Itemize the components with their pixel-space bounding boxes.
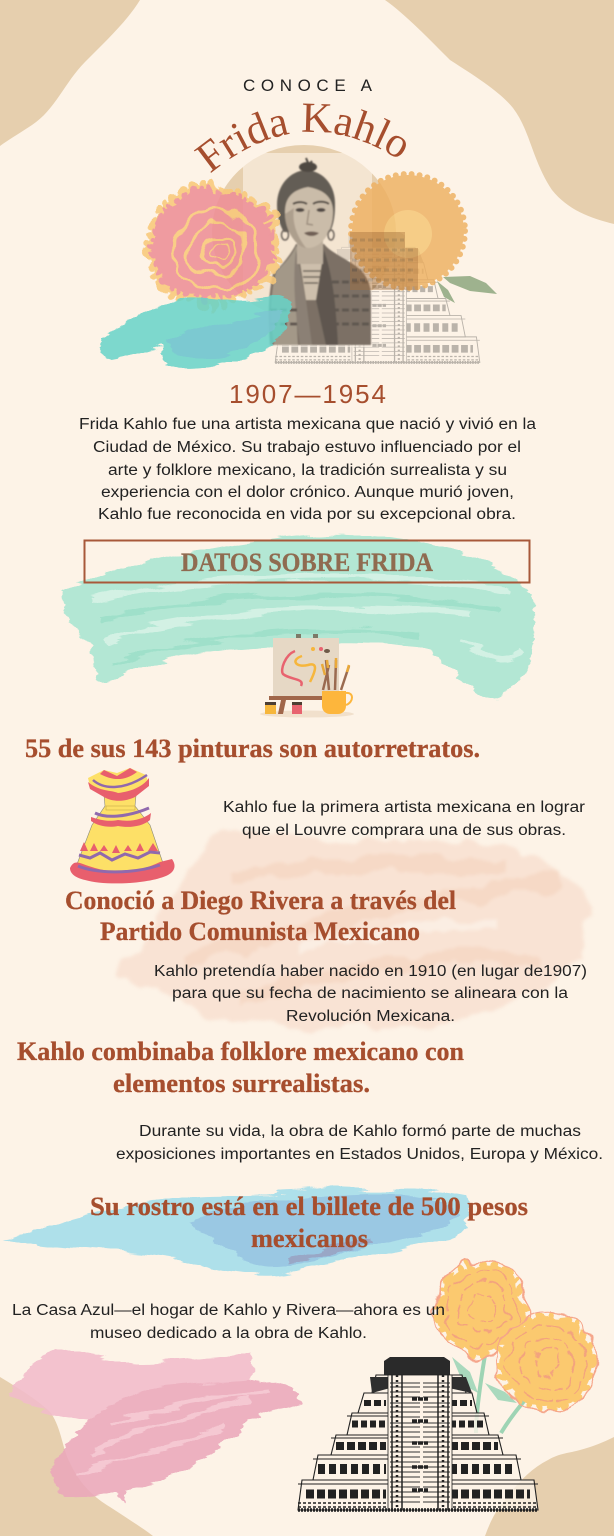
pink brush stroke [10, 1348, 301, 1505]
heading: billete [90, 1192, 528, 1253]
heading: Diego Rivera [65, 886, 456, 946]
text: Louvre: que el Louvre comprara una de sus obras. [242, 822, 566, 839]
heading: folklore: Kahlo combinaba folklore mexicano con [17, 1037, 465, 1066]
title: conoce a: CONOCE A [243, 76, 373, 95]
icon: easel with paints [260, 634, 354, 718]
intro text: arte y folklore mexicano, la tradición surrealista y su [108, 462, 507, 479]
text: Louvre: Kahlo fue la primera artista mexicana en lograr [223, 799, 585, 816]
pink marigold [147, 186, 277, 306]
intro text: Frida Kahlo fue una artista mexicana que nació y vivió en la [79, 416, 536, 433]
stems [476, 1355, 525, 1433]
intro text: Kahlo fue reconocida en vida por su excepcional obra. [98, 506, 516, 523]
hero illustration [100, 145, 497, 368]
text: fecha de nacimiento: Kahlo pretendía haber nacido en 1910 (en lugar de1907) [154, 963, 587, 980]
corner blob: top right [385, 0, 614, 224]
text: Louvre [223, 799, 585, 839]
heading: Diego Rivera: Partido Comunista Mexicano [100, 917, 420, 946]
heading: autorretratos: 55 de sus 143 pinturas son autorretratos. [25, 734, 480, 763]
portrait of Frida [269, 158, 371, 345]
corner blob: bottom left [0, 1377, 153, 1536]
heading: folklore: elementos surrealistas. [113, 1069, 370, 1098]
photo frame [243, 153, 372, 347]
intro text [79, 416, 536, 523]
text: Casa Azul: museo dedicado a la obra de Kahlo. [90, 1325, 367, 1342]
text: Casa Azul: La Casa Azul—el hogar de Kahlo y Rivera—ahora es un [12, 1302, 445, 1319]
orange marigold [351, 174, 465, 288]
text: exposiciones: exposiciones importantes en Estados Unidos, Europa y México. [116, 1146, 603, 1163]
dates: 1907—1954 [229, 379, 386, 409]
intro text: experiencia con el dolor crónico. Aunque murió joven, [101, 484, 514, 501]
green brush stroke [62, 534, 535, 698]
temple engraving [298, 1357, 538, 1510]
heading: billete: Su rostro está en el billete de 500 pesos [90, 1192, 528, 1221]
faded temple [275, 232, 480, 362]
heading box: datos sobre Frida: DATOS SOBRE FRIDA [181, 548, 433, 577]
peach brush stroke [118, 829, 595, 1030]
text: fecha de nacimiento [154, 963, 587, 1025]
teal brush stroke [100, 297, 292, 368]
heading: Diego Rivera: Conoció a Diego Rivera a través del [65, 886, 456, 915]
heading box: datos sobre Frida [84, 540, 530, 582]
corner blob: top left [0, 0, 140, 146]
heading: folklore [17, 1037, 465, 1098]
temple top seen through flower [350, 232, 418, 290]
text: exposiciones: Durante su vida, la obra de Kahlo formó parte de muchas [139, 1123, 581, 1140]
blue brush stroke [2, 1188, 469, 1275]
title: Frida Kahlo: Frida Kahlo [194, 104, 406, 173]
marigolds with stems [434, 1260, 597, 1433]
leaves of orange marigold [437, 276, 497, 303]
text: Casa Azul [12, 1302, 445, 1342]
text: fecha de nacimiento: Revolución Mexicana. [286, 1008, 455, 1025]
leaves [452, 1357, 517, 1403]
heading: billete: mexicanos [251, 1224, 368, 1253]
flower [434, 1260, 530, 1356]
text: exposiciones [116, 1123, 603, 1163]
corner blob: bottom right [485, 1437, 614, 1536]
intro text: Ciudad de México. Su trabajo estuvo influenciado por el [93, 439, 521, 456]
icon: Mexican dress [70, 768, 175, 883]
flower [497, 1313, 597, 1413]
peach circle [212, 145, 396, 319]
text: fecha de nacimiento: para que su fecha de nacimiento se alineara con la [172, 985, 568, 1002]
